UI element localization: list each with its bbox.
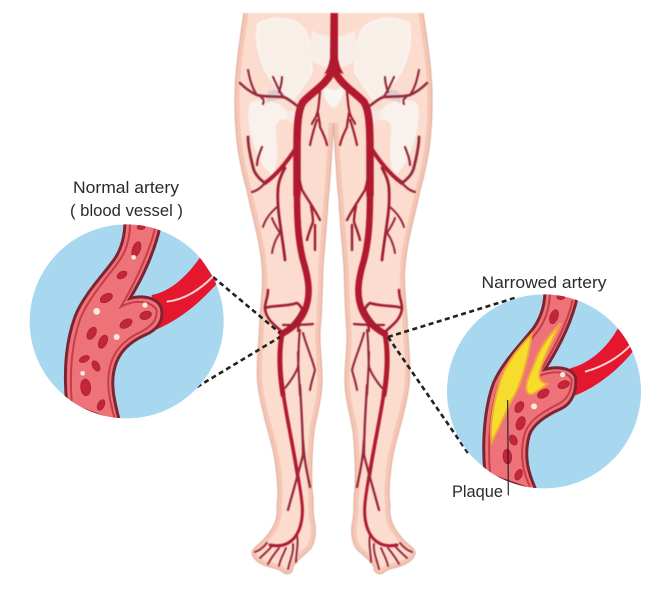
dashed connector lines xyxy=(197,277,518,453)
white blood cells xyxy=(80,255,148,376)
callout: normal artery circle xyxy=(30,220,224,423)
main vessel wall and lumen xyxy=(484,290,577,492)
label: narrowed artery: Narrowed artery xyxy=(482,274,607,292)
body: legs and hips with arteries xyxy=(235,13,432,574)
white blood cells xyxy=(531,372,565,409)
right leg xyxy=(333,13,432,574)
red branch vessel xyxy=(570,328,634,397)
red branch vessel xyxy=(152,257,217,332)
aorta xyxy=(324,13,344,74)
plaque pointer line xyxy=(506,400,510,495)
label: plaque: Plaque xyxy=(452,483,503,501)
red blood cells xyxy=(78,225,153,412)
plaque deposits xyxy=(491,334,532,443)
red blood cells xyxy=(502,295,571,481)
label: normal artery: ( blood vessel ) xyxy=(70,202,183,220)
label: normal artery xyxy=(70,179,183,220)
label: normal artery: Normal artery xyxy=(73,179,180,197)
main vessel wall and lumen xyxy=(65,220,162,423)
callout: narrowed artery circle xyxy=(447,290,641,495)
left leg xyxy=(235,13,334,574)
